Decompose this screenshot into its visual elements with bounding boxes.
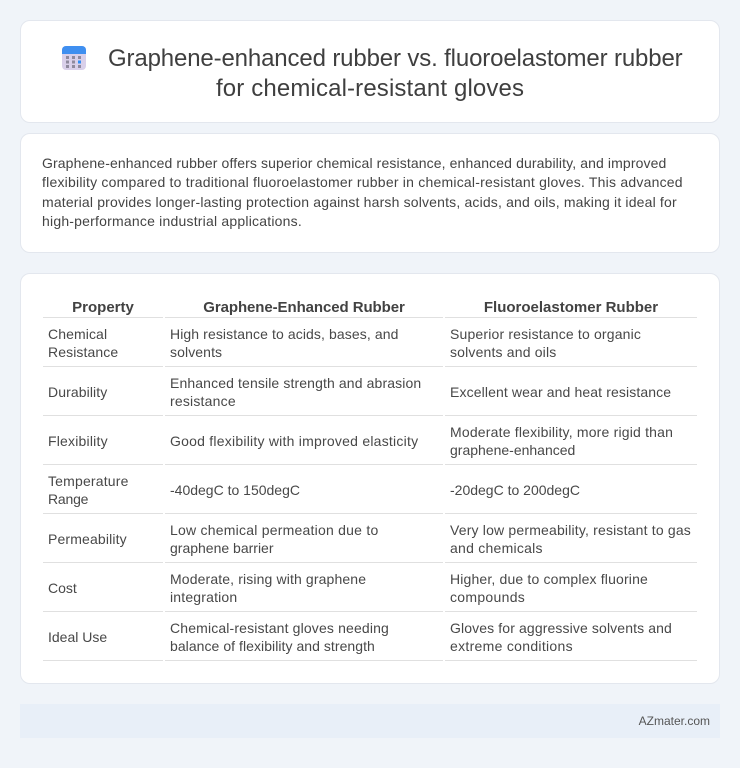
row: Flexibility: Flexibility <box>48 433 108 449</box>
title <box>108 45 683 102</box>
summary card <box>20 133 720 253</box>
row: Ideal Use: Ideal Use <box>48 629 107 645</box>
footer text: AZmater.com: AZmater.com <box>639 714 710 728</box>
row: Temperature Range <box>48 473 129 507</box>
row: Temperature Range: Temperature <box>48 473 129 489</box>
title: Graphene-enhanced rubber vs. fluoroelastomer rubber <box>108 45 683 72</box>
comparison table: -20degC to 200degC <box>450 482 580 498</box>
header card <box>20 20 720 123</box>
comparison table: Very low permeability, resistant to gas <box>450 522 691 538</box>
comparison table: -40degC to 150degC <box>170 482 300 498</box>
comparison table: Gloves for aggressive solvents and <box>450 620 672 636</box>
row: Temperature Range: Range <box>48 491 88 507</box>
comparison table: extreme conditions <box>450 638 573 654</box>
comparison table: Moderate flexibility, more rigid than <box>450 424 673 440</box>
summary text: Graphene-enhanced rubber offers superior chemical resistance, enhanced durability, and improved <box>42 154 666 170</box>
summary text: high-performance industrial applications. <box>42 213 302 229</box>
comparison table: graphene barrier <box>170 540 274 556</box>
summary text <box>42 154 683 229</box>
comparison table: Enhanced tensile strength and abrasion <box>170 375 421 391</box>
column header: Fluoroelastomer Rubber: Fluoroelastomer Rubber <box>484 299 658 316</box>
comparison table: balance of flexibility and strength <box>170 638 375 654</box>
comparison table: High resistance to acids, bases, and <box>170 326 399 342</box>
column header: Property: Property <box>72 299 134 316</box>
row: Chemical Resistance <box>48 326 118 360</box>
comparison table: Moderate, rising with graphene <box>170 571 366 587</box>
comparison table: Good flexibility with improved elasticity <box>170 433 418 449</box>
row: Chemical Resistance: Chemical <box>48 326 107 342</box>
row: Durability: Durability <box>48 384 107 400</box>
comparison table: solvents and oils <box>450 344 556 360</box>
footer bar <box>20 704 720 738</box>
comparison table: Low chemical permeation due to <box>170 522 378 538</box>
column header: Graphene-Enhanced Rubber: Graphene-Enhanced Rubber <box>203 299 405 316</box>
summary text: material provides longer-lasting protection against harsh solvents, acids, and oils, making it ideal for <box>42 194 677 210</box>
table card <box>20 273 720 684</box>
icon: calendar <box>62 46 86 70</box>
comparison table: solvents <box>170 344 222 360</box>
comparison table: integration <box>170 589 237 605</box>
summary text: flexibility compared to traditional fluoroelastomer rubber in chemical-resistant gloves. This advanced <box>42 174 683 190</box>
comparison table: Chemical-resistant gloves needing <box>170 620 389 636</box>
title: for chemical-resistant gloves <box>216 75 524 102</box>
row: Chemical Resistance: Resistance <box>48 344 118 360</box>
row: Cost: Cost <box>48 580 77 596</box>
comparison table: Excellent wear and heat resistance <box>450 384 671 400</box>
comparison table: and chemicals <box>450 540 543 556</box>
comparison table: compounds <box>450 589 525 605</box>
comparison table: resistance <box>170 393 236 409</box>
comparison table: Higher, due to complex fluorine <box>450 571 648 587</box>
comparison table: Superior resistance to organic <box>450 326 641 342</box>
comparison table: graphene-enhanced <box>450 442 575 458</box>
row: Permeability: Permeability <box>48 531 127 547</box>
